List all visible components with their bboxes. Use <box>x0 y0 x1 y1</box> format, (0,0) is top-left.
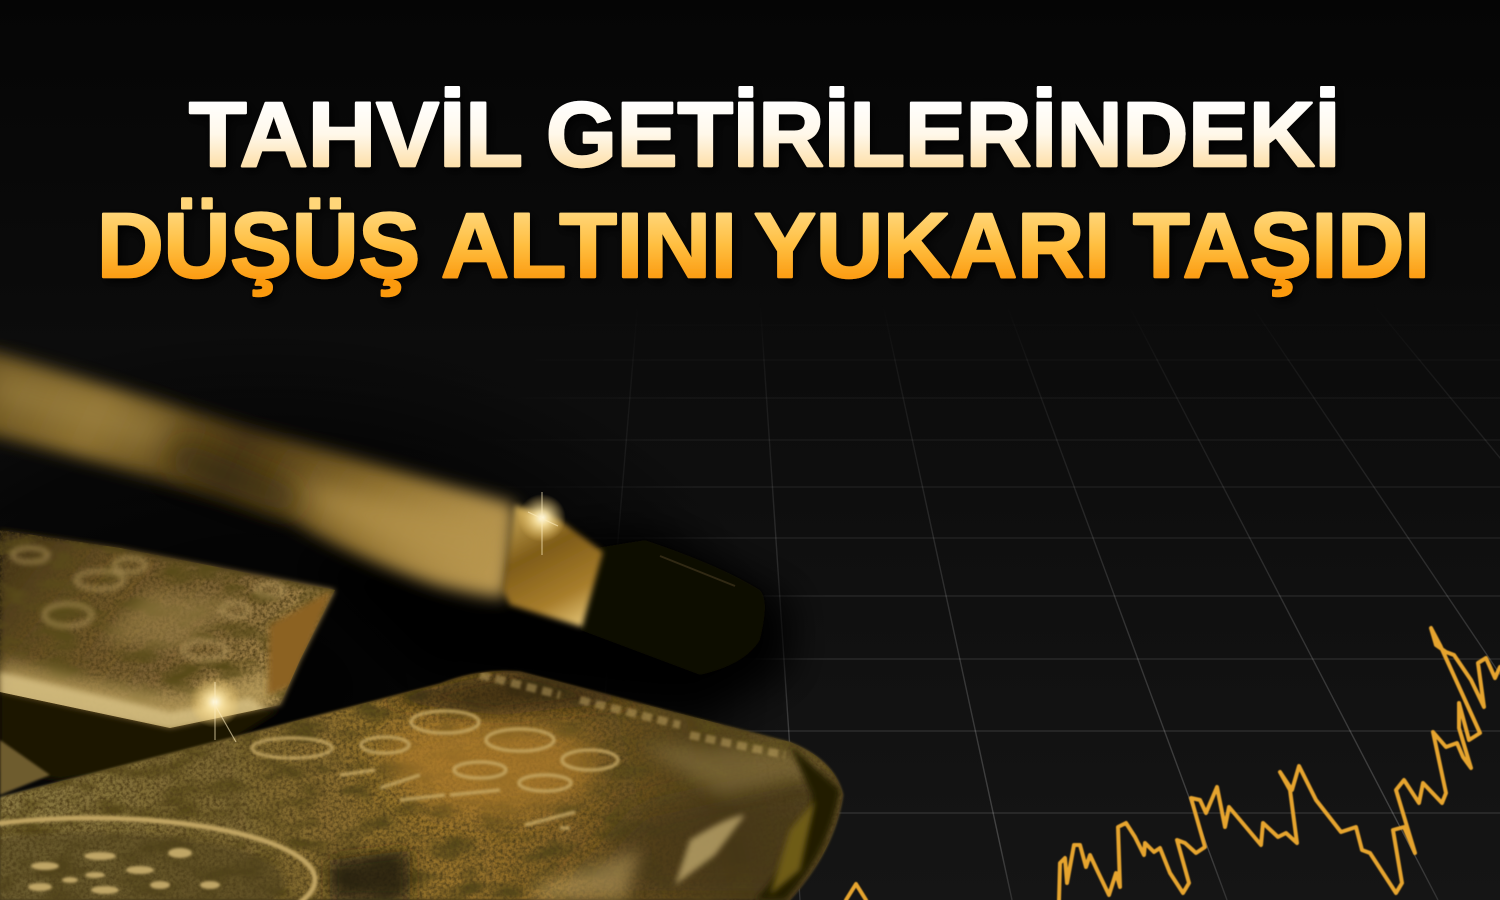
title line 1: TAHVİL <box>189 84 523 186</box>
gold bar: front engraved bar <box>0 660 850 900</box>
gold bar: small corner piece <box>0 740 50 795</box>
title line 1 <box>189 84 1340 186</box>
title line 1: GETİRİLERİNDEKİ <box>546 84 1340 186</box>
shadow around gold bars <box>0 300 880 900</box>
gold bars photo <box>0 348 850 900</box>
gold bar: left engraved bar <box>0 520 340 780</box>
title line 2: TAŞIDI <box>1133 195 1430 297</box>
title line 2: ALTINI <box>441 195 737 297</box>
title line 2 <box>97 195 1430 297</box>
gold bar: blurred top bar <box>0 348 790 720</box>
sparkle <box>518 494 566 542</box>
title line 2: DÜŞÜŞ <box>97 195 420 297</box>
title line 2: YUKARI <box>754 195 1110 297</box>
title <box>97 84 1430 297</box>
embossed seal <box>0 818 315 900</box>
embossed marks <box>252 675 785 828</box>
sparkle <box>189 676 241 728</box>
chart grid <box>619 354 1500 900</box>
gold price line chart <box>846 628 1500 900</box>
sparkle rays <box>215 492 558 742</box>
